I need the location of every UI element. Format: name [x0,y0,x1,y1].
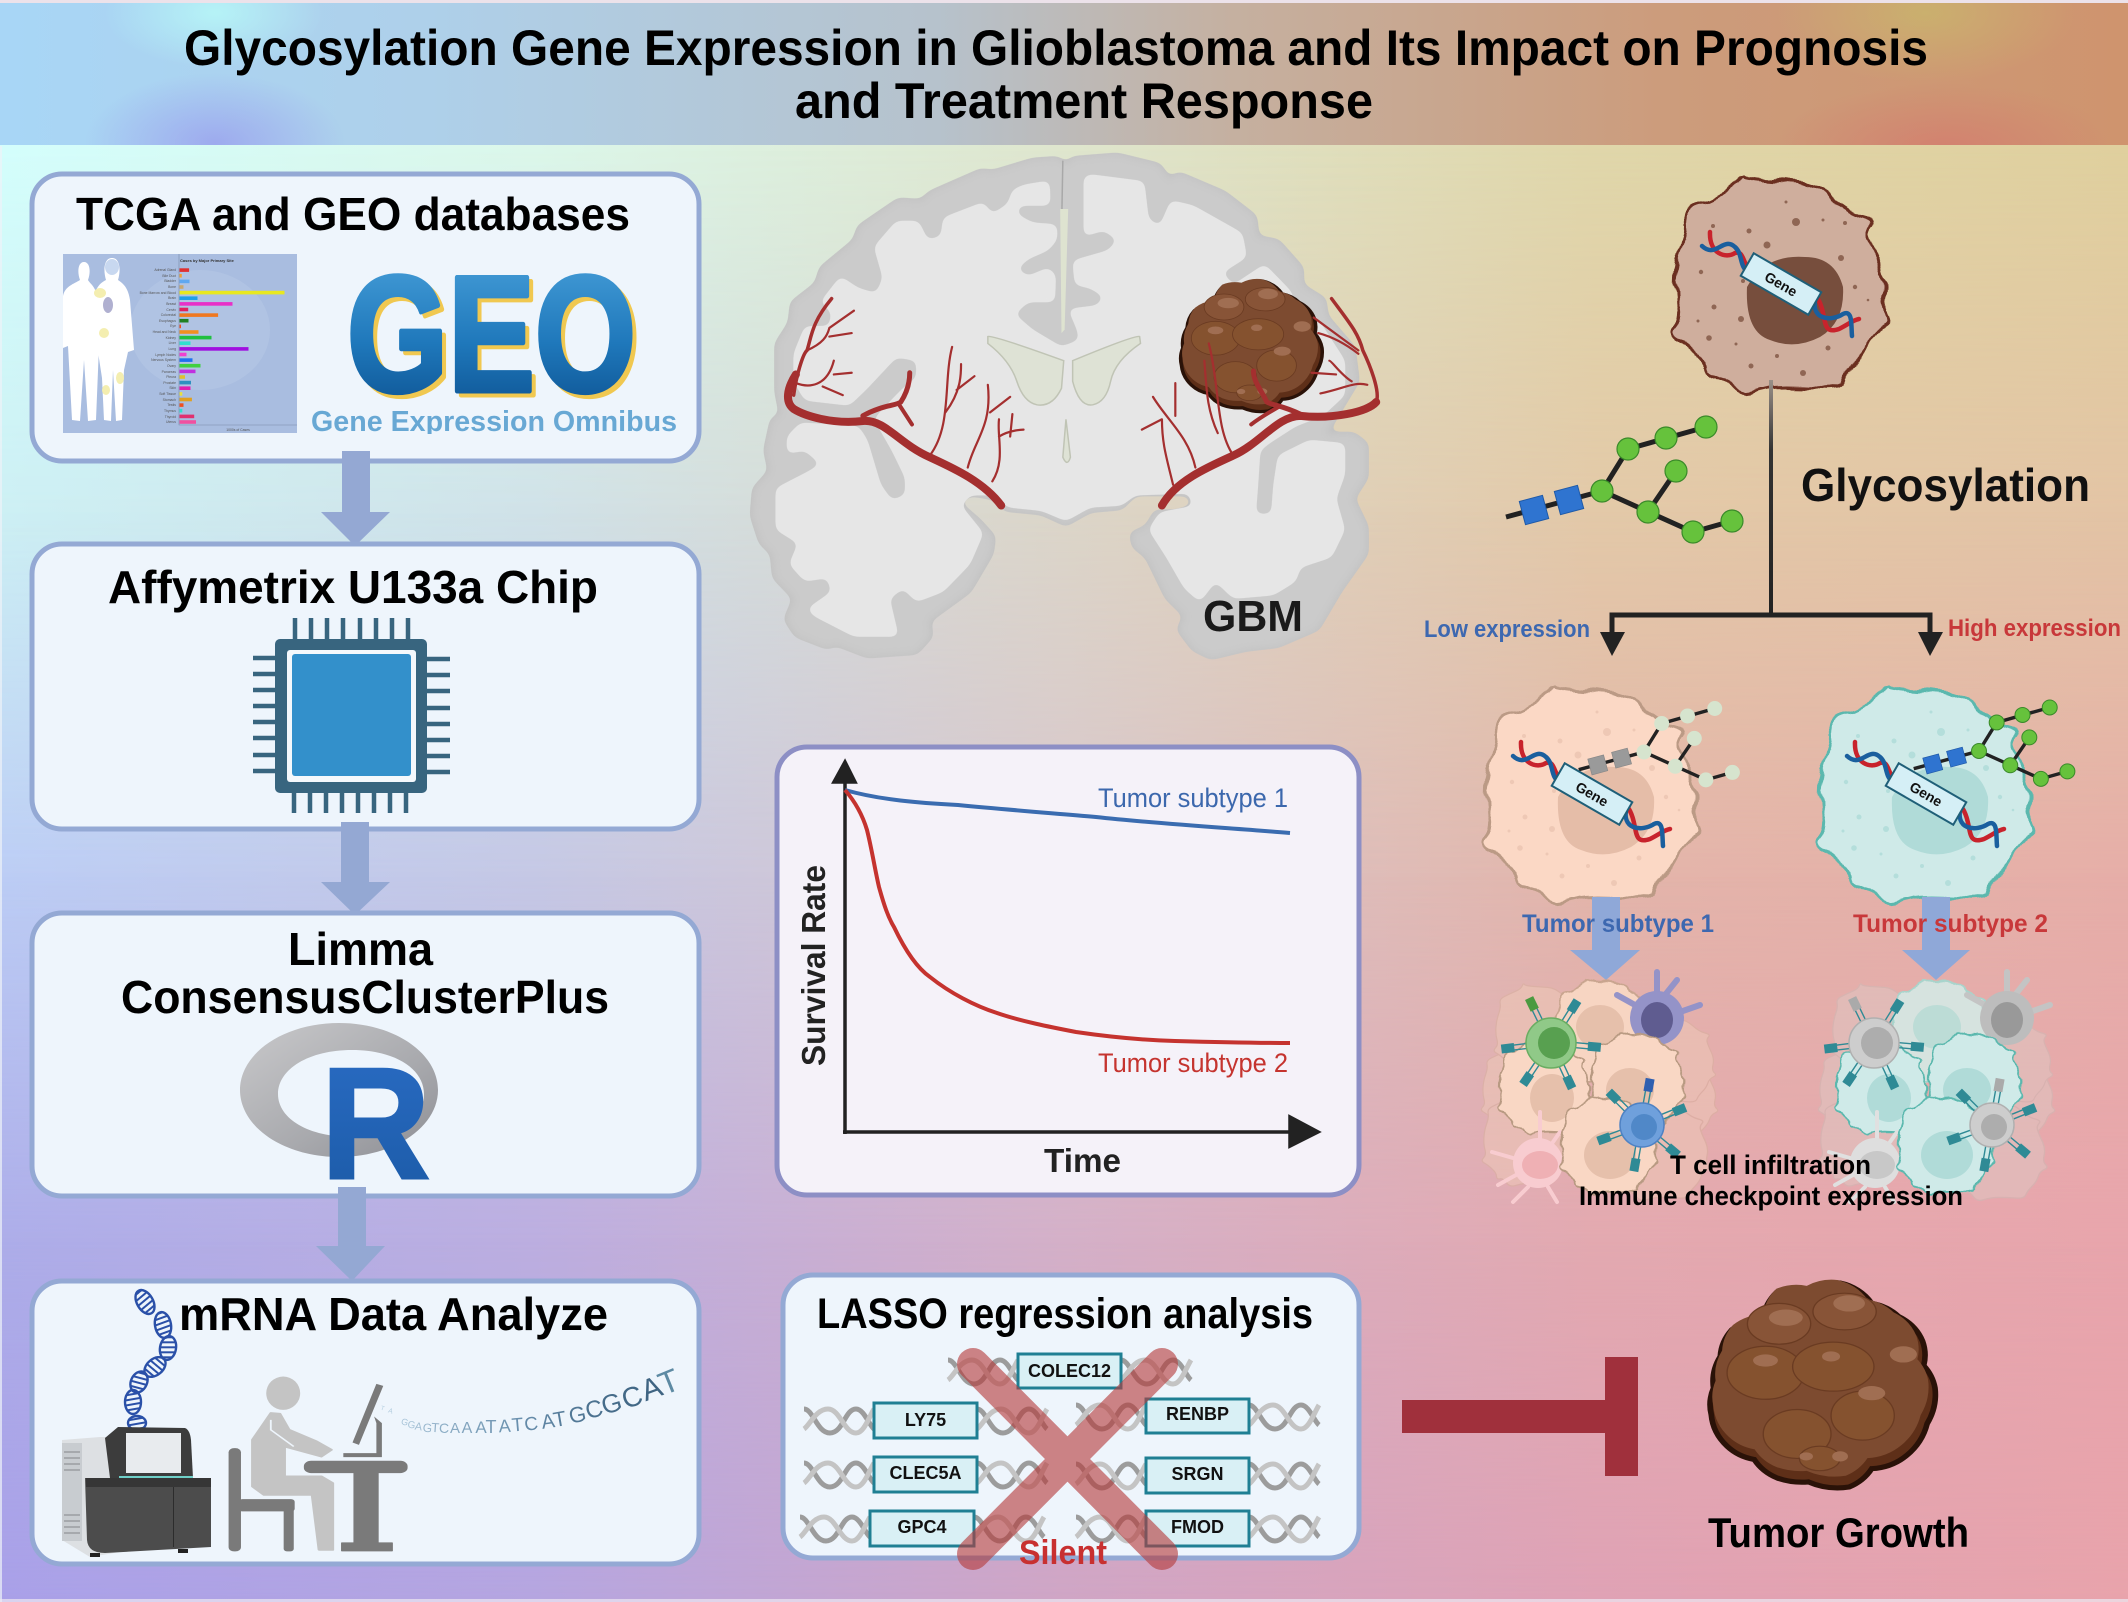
icon: glycan chain [1506,416,1743,543]
red cross [973,1364,1162,1554]
T cell: gray upper [1824,996,1924,1090]
heading: TCGA and GEO: TCGA and GEO databases [76,188,630,240]
title [184,20,1928,129]
chart: cases by major primary site: Skin [169,386,176,390]
panel: mRNA data analyze [32,1281,699,1564]
title: and Treatment Response [795,73,1373,129]
cell cluster: subtype 2 [1818,972,2055,1202]
gene: RENBP [1146,1399,1249,1433]
text: sequence letters: A [475,1418,487,1437]
text: sequence letters: T [431,1420,440,1435]
heading: Limma: Limma [288,923,433,975]
chart: cases by major primary site: Eye [170,324,176,328]
T cell: gray lower [1946,1078,2037,1172]
chart: cases by major primary site: Thyroid [165,415,176,419]
chart: cases by major primary site: Esophagus [159,319,176,323]
chart: cases by major primary site: Stomach [163,398,176,402]
label: subtype 1: Tumor subtype 1 [1098,783,1288,813]
text: sequence letters: A [540,1410,557,1434]
edge highlight bottom [0,1599,2128,1602]
gene: GPC4 [870,1511,974,1546]
icon: DNA helix [125,1287,178,1430]
chart: cases by major primary site: 1000s of Cases [226,428,250,432]
title: Glycosylation Gene Expression in Glioblastoma and Its Impact on Prognosis [184,20,1928,76]
icon: R logo [240,1023,438,1212]
chart: cases by major primary site: Breast [166,302,176,306]
white matter [776,174,1345,637]
gene: FMOD: FMOD [1171,1517,1224,1537]
chart: cases by major primary site: Liver [169,341,177,345]
inhibition symbol [1402,1357,1638,1476]
gene: LY75 [874,1403,977,1438]
chart: cases by major primary site: Bile Duct [162,274,176,278]
text: sequence letters: A [462,1420,473,1437]
label: tumor subtype 1: Tumor subtype 1 [1522,910,1714,938]
chart: cases by major primary site: Testis [167,403,176,407]
arrow: subtype 2 to microenvironment [1902,897,1970,980]
icon: GEO logo: GEO [347,242,636,426]
gene: CLEC5A: CLEC5A [889,1463,962,1483]
icon: GEO logo: GEO [351,246,640,430]
text: sequence letters: T [653,1361,685,1402]
arrow: subtype 1 to microenvironment [1570,897,1640,980]
arrowhead: low [1600,632,1625,656]
chart: cases by major primary site: Lymph Nodes [155,353,176,357]
text: sequence letters: G [566,1401,588,1429]
chart: cases by major primary site: Nervous System [151,358,176,362]
label: tumor subtype 2: Tumor subtype 2 [1853,910,2048,938]
chart: cases by major primary site: Pleura [166,375,176,379]
text: sequence letters: T [511,1415,525,1436]
text: sequence letters: T [552,1407,568,1432]
connector lines [1600,380,1943,656]
chart: cases by major primary site: Thymus [164,409,176,413]
heading: Affymetrix: Affymetrix U133a Chip [108,561,598,613]
icon: R logo: R [321,1036,430,1212]
heading: mRNA: mRNA Data Analyze [179,1288,608,1340]
chart: cases by major primary site: Head and Neck [153,330,176,334]
curve: tumor subtype 2 [845,790,1290,1043]
gene: SRGN: SRGN [1171,1464,1224,1484]
text: sequence letters: A [387,1408,394,1416]
gene: RENBP: RENBP [1166,1404,1229,1424]
x axis [843,1117,1318,1146]
chart: cases by major primary site: Prostate [163,381,176,385]
gene: GPC4: GPC4 [897,1517,947,1537]
cell: tumor subtype 2 [1817,684,2075,904]
label: Time: Time [1044,1142,1121,1179]
vessels [788,299,1377,505]
panel: Limma ConsensusClusterPlus [32,913,699,1212]
text: sequence letters: G [400,1416,409,1428]
text: sequence letters: T [486,1417,496,1437]
gene: SRGN [1146,1458,1249,1493]
chart: cases by major primary site: Lung [168,347,176,351]
panel: survival chart [777,747,1359,1195]
text: sequence letters: A [498,1416,511,1436]
text: sequence letters: G [422,1421,433,1435]
panel: Affymetrix chip [32,544,699,829]
cell: glioblastoma parent: Gene [1762,268,1800,300]
T cell: green [1501,996,1601,1090]
y axis [834,762,855,1134]
illustration: brain coronal section [751,154,1377,659]
chart: cases by major primary site: Colorectal [161,313,176,317]
text: sequence letters: T [380,1406,385,1413]
chart: cases by major primary site: Uterus [166,420,176,424]
gene: CLEC5A [874,1457,977,1492]
chart: cases by major primary site: Brain [168,296,176,300]
label: Tumor Growth: Tumor Growth [1708,1509,1969,1556]
cell: tumor subtype 1 [1483,684,1740,904]
label: GBM: GBM [1203,592,1303,641]
label: Glycosylation: Glycosylation [1801,459,2090,511]
DNA strands [800,1360,1319,1541]
cell cluster: subtype 1 [1481,972,1718,1202]
edge highlight left [0,146,2,1602]
label: Silent: Silent [1019,1534,1107,1572]
icon: sequencer machine [62,1427,211,1557]
curve: tumor subtype 1 [845,790,1290,833]
icon: person at desk [229,1377,408,1551]
ventricles and fissure [988,161,1141,462]
chart: cases by major primary site: Bone Marrow and Blood [140,291,176,295]
chart: cases by major primary site: Kidney [166,336,176,340]
arrowhead: high [1918,632,1943,656]
cell: tumor subtype 2: Gene [1907,778,1945,810]
label: subtype 2: Tumor subtype 2 [1098,1048,1288,1078]
text: sequence letters [380,1361,685,1437]
chart: cases by major primary site: Pancreas [162,370,176,374]
T cell: blue [1596,1078,1687,1172]
icon: microchip [253,618,450,813]
chart: cases by major primary site: Bladder [164,279,177,283]
header band [0,0,2128,145]
text: sequence letters: A [414,1421,424,1434]
chart: cases by major primary site: Ovary [167,364,176,368]
gene: FMOD [1146,1511,1249,1546]
cell: tumor subtype 1: Gene [1573,778,1611,810]
gene: COLEC12: COLEC12 [1028,1361,1111,1381]
tumor in brain [1181,279,1322,412]
panel: LASSO regression [783,1275,1359,1572]
text: Gene Expression Omnibus: Gene Expression Omnibus [311,406,677,438]
chart: cases by major primary site [63,254,297,433]
text: sequence letters: C [583,1395,606,1425]
label: T cell infiltration: T cell infiltration [1670,1150,1871,1180]
arrow: chip to limma [321,822,390,915]
arrow: limma to mRNA [316,1187,385,1281]
text: sequence letters: C [439,1420,449,1436]
label: Low expression: Low expression [1424,616,1590,643]
arrow: databases to chip [321,451,390,546]
chart: cases by major primary site: Soft Tissue [159,392,176,396]
brain silhouette [751,154,1367,659]
chart: cases by major primary site: Cervix [166,308,176,312]
gene: LY75: LY75 [905,1410,946,1430]
chart: cases by major primary site: Bone [168,285,176,289]
text: sequence letters: A [450,1420,460,1437]
chart: cases by major primary site: Cases by Major Primary Site [180,258,235,263]
text: sequence letters: A [637,1370,667,1408]
tumor icon bottom [1710,1280,1935,1488]
chart: cases by major primary site: Adrenal Gland [154,268,176,272]
label: Survival Rate: Survival Rate [795,865,832,1066]
text: sequence letters: G [407,1419,416,1432]
gene: COLEC12 [1018,1354,1121,1388]
panel: TCGA and GEO databases [32,174,699,461]
heading: ConsensusClusterPlus: ConsensusClusterPlus [121,971,609,1023]
cell: glioblastoma parent [1672,174,1890,394]
heading: LASSO: LASSO regression analysis [817,1290,1313,1338]
label: Immune checkpoint expression: Immune checkpoint expression [1579,1181,1963,1211]
text: sequence letters: C [618,1379,646,1415]
text: sequence letters: G [598,1386,625,1421]
text: sequence letters: C [523,1413,539,1436]
